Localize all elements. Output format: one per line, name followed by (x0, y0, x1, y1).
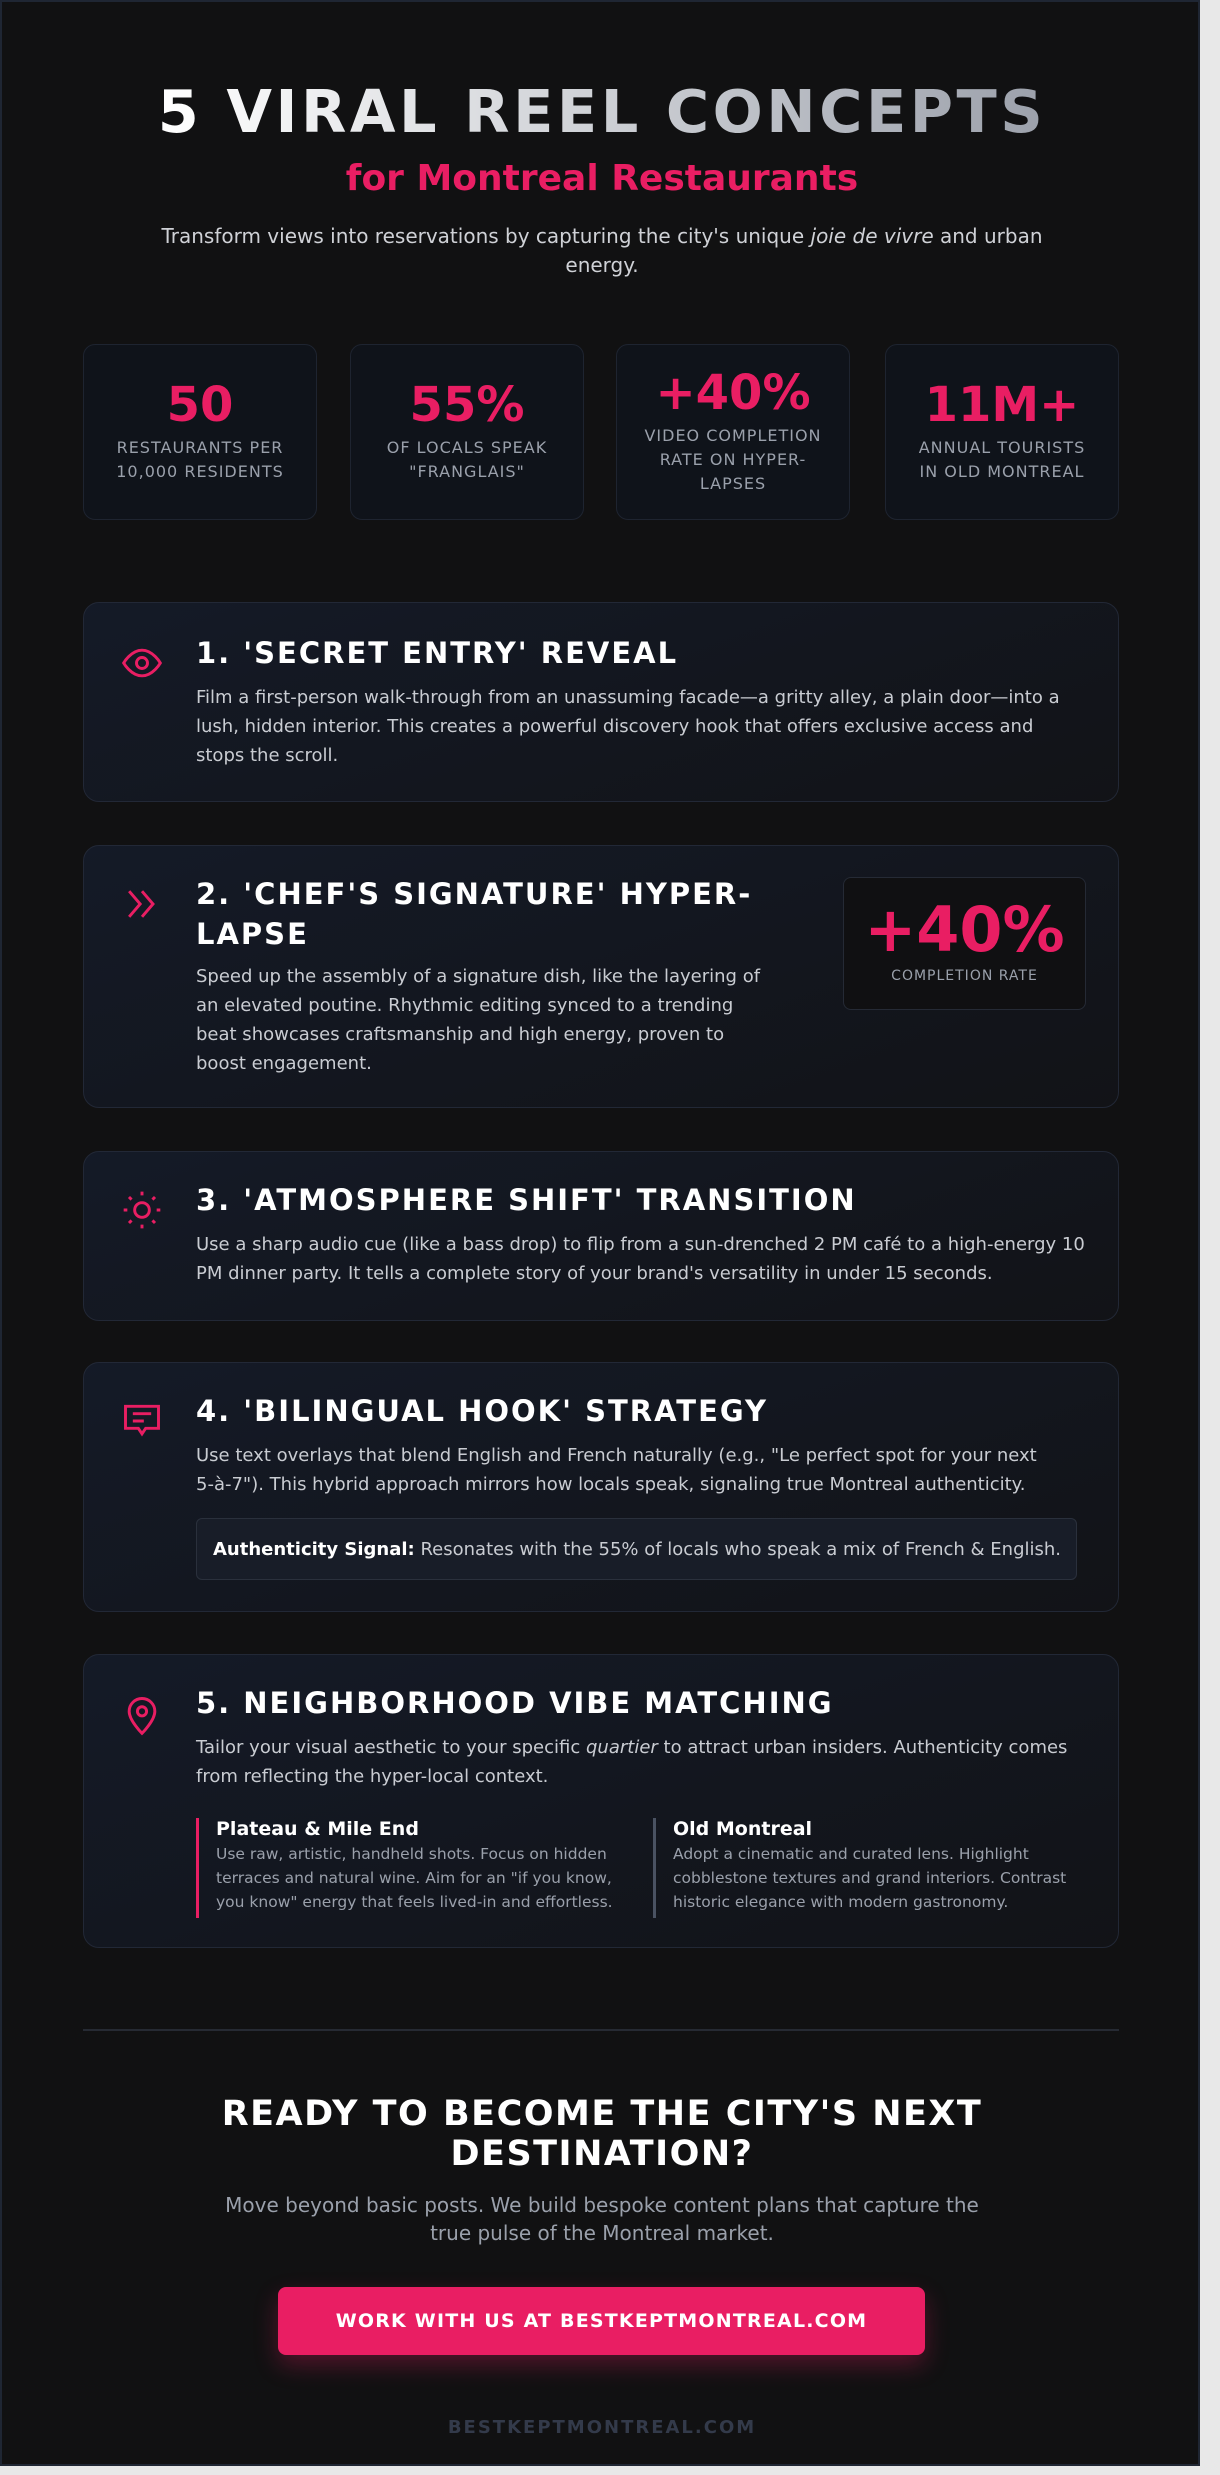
heading: 4. 'BILINGUAL HOOK' STRATEGY (196, 1394, 768, 1428)
text: Use a sharp audio cue (like a bass drop) to flip from a sun-drenched 2 PM café to a high-energy 10 PM dinner party. It tells a complete story of your brand's versatility in under 15 seconds. (196, 1234, 1085, 1284)
callout: +40%: COMPLETION RATE (891, 968, 1038, 984)
callout: authenticity signal: Authenticity Signal: Resonates with the 55% of locals who speak a mix of French & English. (213, 1539, 1061, 1560)
icon: chevrons (128, 890, 155, 918)
stat: restaurants: RESTAURANTS PER (117, 438, 283, 457)
stat: completion: RATE ON HYPER- (660, 450, 806, 469)
stat: franglais (350, 344, 584, 520)
stat: restaurants: 50 (167, 377, 233, 433)
icon: eye (122, 648, 162, 678)
stat: franglais: 55% (410, 377, 524, 433)
text: Film a first-person walk-through from an unassuming facade—a gritty alley, a plain door—into a lush, hidden interior. This creates a powerful discovery hook that offers exclusive access and stops the scroll. (196, 687, 1060, 766)
stat: tourists (885, 344, 1119, 520)
CTA button (278, 2287, 925, 2355)
CTA heading: READY TO BECOME THE CITY'S NEXT DESTINATION? (222, 2094, 982, 2174)
panel: secret entry (83, 602, 1119, 802)
panel: hyper-lapse (83, 845, 1119, 1108)
CTA text: Move beyond basic posts. We build bespoke content plans that capture the true pulse of the Montreal market. (225, 2193, 979, 2245)
callout: +40% (843, 877, 1086, 1010)
text: Tailor your visual aesthetic to your specific quartier to attract urban insiders. Authenticity comes from reflecting the hyper-local context. (196, 1737, 1067, 1787)
panel: neighborhood vibe (83, 1654, 1119, 1948)
stat: completion (616, 344, 850, 520)
title: 5 VIRAL REEL CONCEPTS (158, 77, 1046, 146)
stat: franglais: "FRANGLAIS" (409, 462, 525, 481)
callout: +40%: +40% (864, 893, 1065, 966)
stat: tourists: 11M+ (925, 377, 1079, 433)
subtitle: for Montreal Restaurants (346, 158, 858, 199)
icon: sun (124, 1192, 160, 1228)
column: old montreal: Old Montreal (673, 1818, 812, 1840)
callout: authenticity signal (196, 1518, 1077, 1580)
column: plateau (196, 1818, 636, 1918)
icon: map pin (128, 1697, 156, 1736)
column: plateau: Use raw, artistic, handheld shots. Focus on hidden terraces and natural wine. Aim for an "if you know, you know" energy that feels lived-in and effortless. (216, 1845, 613, 1911)
icon: chat (124, 1404, 160, 1436)
heading: 3. 'ATMOSPHERE SHIFT' TRANSITION (196, 1183, 857, 1217)
stat: tourists: ANNUAL TOURISTS (919, 438, 1085, 457)
column: old montreal (653, 1818, 1103, 1918)
stat: franglais: OF LOCALS SPEAK (387, 438, 547, 457)
stat: restaurants: 10,000 RESIDENTS (116, 462, 284, 481)
heading: 1. 'SECRET ENTRY' REVEAL (196, 636, 678, 670)
stat: completion: +40% (655, 365, 811, 421)
stat: tourists: IN OLD MONTREAL (920, 462, 1084, 481)
intro text: Transform views into reservations by capturing the city's unique joie de vivre and urban energy. (161, 224, 1043, 277)
column: old montreal: Adopt a cinematic and curated lens. Highlight cobblestone textures and grand interiors. Contrast historic elegance with modern gastronomy. (673, 1845, 1066, 1911)
CTA button: WORK WITH US AT BESTKEPTMONTREAL.COM (336, 2310, 867, 2332)
panel: atmosphere shift (83, 1151, 1119, 1321)
column: plateau: Plateau & Mile End (216, 1818, 419, 1840)
heading: 2. 'CHEF'S SIGNATURE' HYPER-LAPSE (196, 877, 752, 951)
footer: BESTKEPTMONTREAL.COM (448, 2417, 756, 2438)
stat: restaurants (83, 344, 317, 520)
stat: completion: VIDEO COMPLETION (644, 426, 822, 445)
panel: bilingual hook (83, 1362, 1119, 1612)
text: Speed up the assembly of a signature dish, like the layering of an elevated poutine. Rhythmic editing synced to a trending beat showcases craftsmanship and high energy, proven to boost engagement. (196, 966, 760, 1074)
text: Use text overlays that blend English and French naturally (e.g., "Le perfect spot for your next 5-à-7"). This hybrid approach mirrors how locals speak, signaling true Montreal authenticity. (196, 1445, 1037, 1495)
heading: 5. NEIGHBORHOOD VIBE MATCHING (196, 1686, 834, 1720)
stat: completion: LAPSES (700, 474, 766, 493)
